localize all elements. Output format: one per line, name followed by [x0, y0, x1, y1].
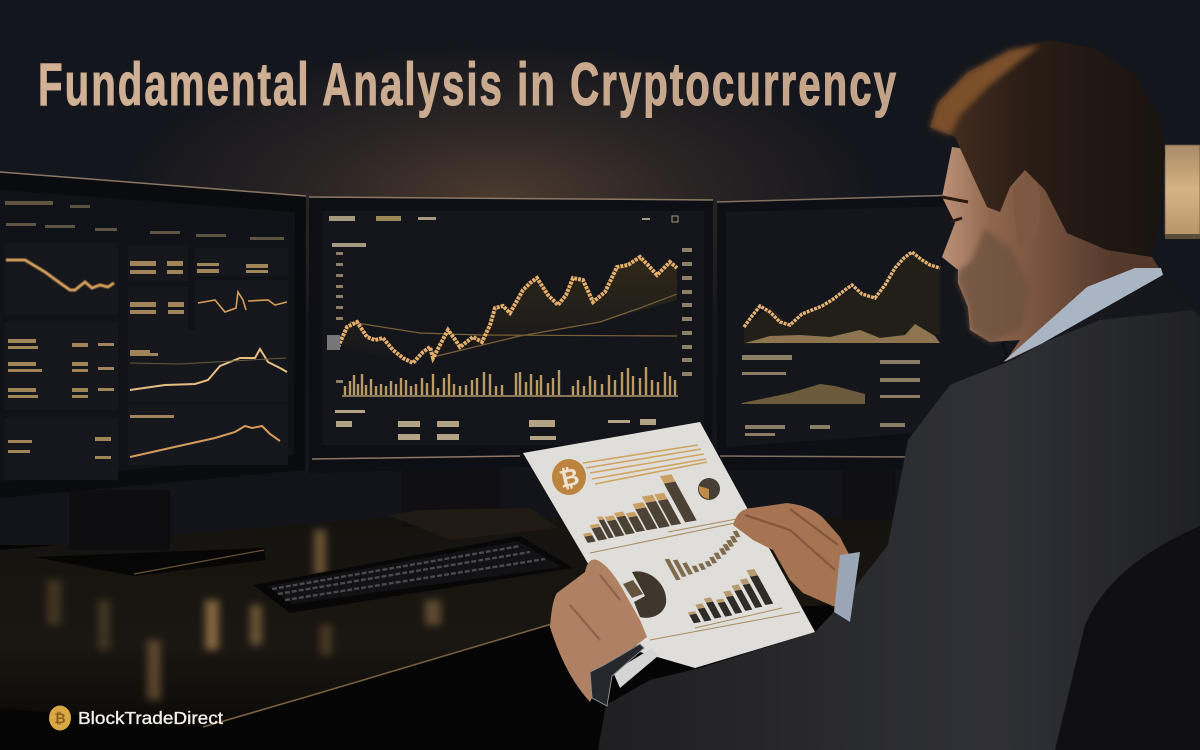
- top bar chart: [561, 474, 698, 543]
- data table: [335, 410, 656, 440]
- hair: [930, 40, 1165, 257]
- shirt collar: [1003, 268, 1163, 362]
- center candlestick area: [338, 257, 677, 363]
- lamp: [1165, 145, 1200, 239]
- top pie chart: [698, 478, 720, 500]
- beard: [958, 228, 1030, 342]
- logo: [49, 706, 223, 730]
- suit jacket: [598, 275, 1200, 750]
- bitcoin coin: ₿: [557, 463, 582, 494]
- middle bar chart: [657, 531, 757, 580]
- center monitor: [309, 197, 713, 473]
- keyboard: [253, 536, 573, 613]
- paper rules: [590, 518, 800, 640]
- man: [598, 40, 1200, 750]
- left monitor candlestick line: [6, 260, 114, 290]
- chair: [1055, 526, 1200, 750]
- monitor stands: [34, 465, 895, 576]
- volume bars: [345, 367, 675, 395]
- left monitor small numbers: [8, 261, 268, 459]
- jacket collar: [1043, 275, 1193, 343]
- desk: [0, 470, 900, 750]
- right monitor price line: [744, 252, 940, 327]
- bottom bar chart: [672, 569, 776, 623]
- right monitor volume: [745, 324, 940, 343]
- ear: [1013, 179, 1040, 246]
- logo coin: [49, 706, 71, 730]
- logo coin: ₿: [54, 710, 66, 726]
- large pie chart: [623, 571, 666, 618]
- left monitor: [0, 172, 306, 498]
- hair highlight: [930, 45, 1040, 135]
- left monitor toolbar: [5, 201, 284, 240]
- bitcoin coin: [552, 459, 586, 495]
- center monitor toolbar: [329, 216, 678, 247]
- logo wordmark: BlockTradeDirect: [78, 708, 223, 728]
- cuff: [834, 552, 860, 622]
- left monitor line charts: [130, 292, 287, 457]
- wristwatch: [590, 644, 644, 706]
- neck and face: [942, 147, 1160, 362]
- report paper: [523, 422, 815, 668]
- right monitor: [717, 195, 1010, 470]
- header lines: [583, 445, 707, 484]
- eye and brow: [942, 197, 968, 222]
- shirt cuff: [613, 648, 658, 688]
- left monitor panels: [5, 243, 288, 480]
- left hand: [550, 560, 658, 706]
- moving average lines: [350, 294, 677, 357]
- right hand: [733, 503, 860, 622]
- candlestick line: [338, 257, 677, 363]
- axis labels: [327, 248, 692, 383]
- right monitor small data: [742, 355, 920, 436]
